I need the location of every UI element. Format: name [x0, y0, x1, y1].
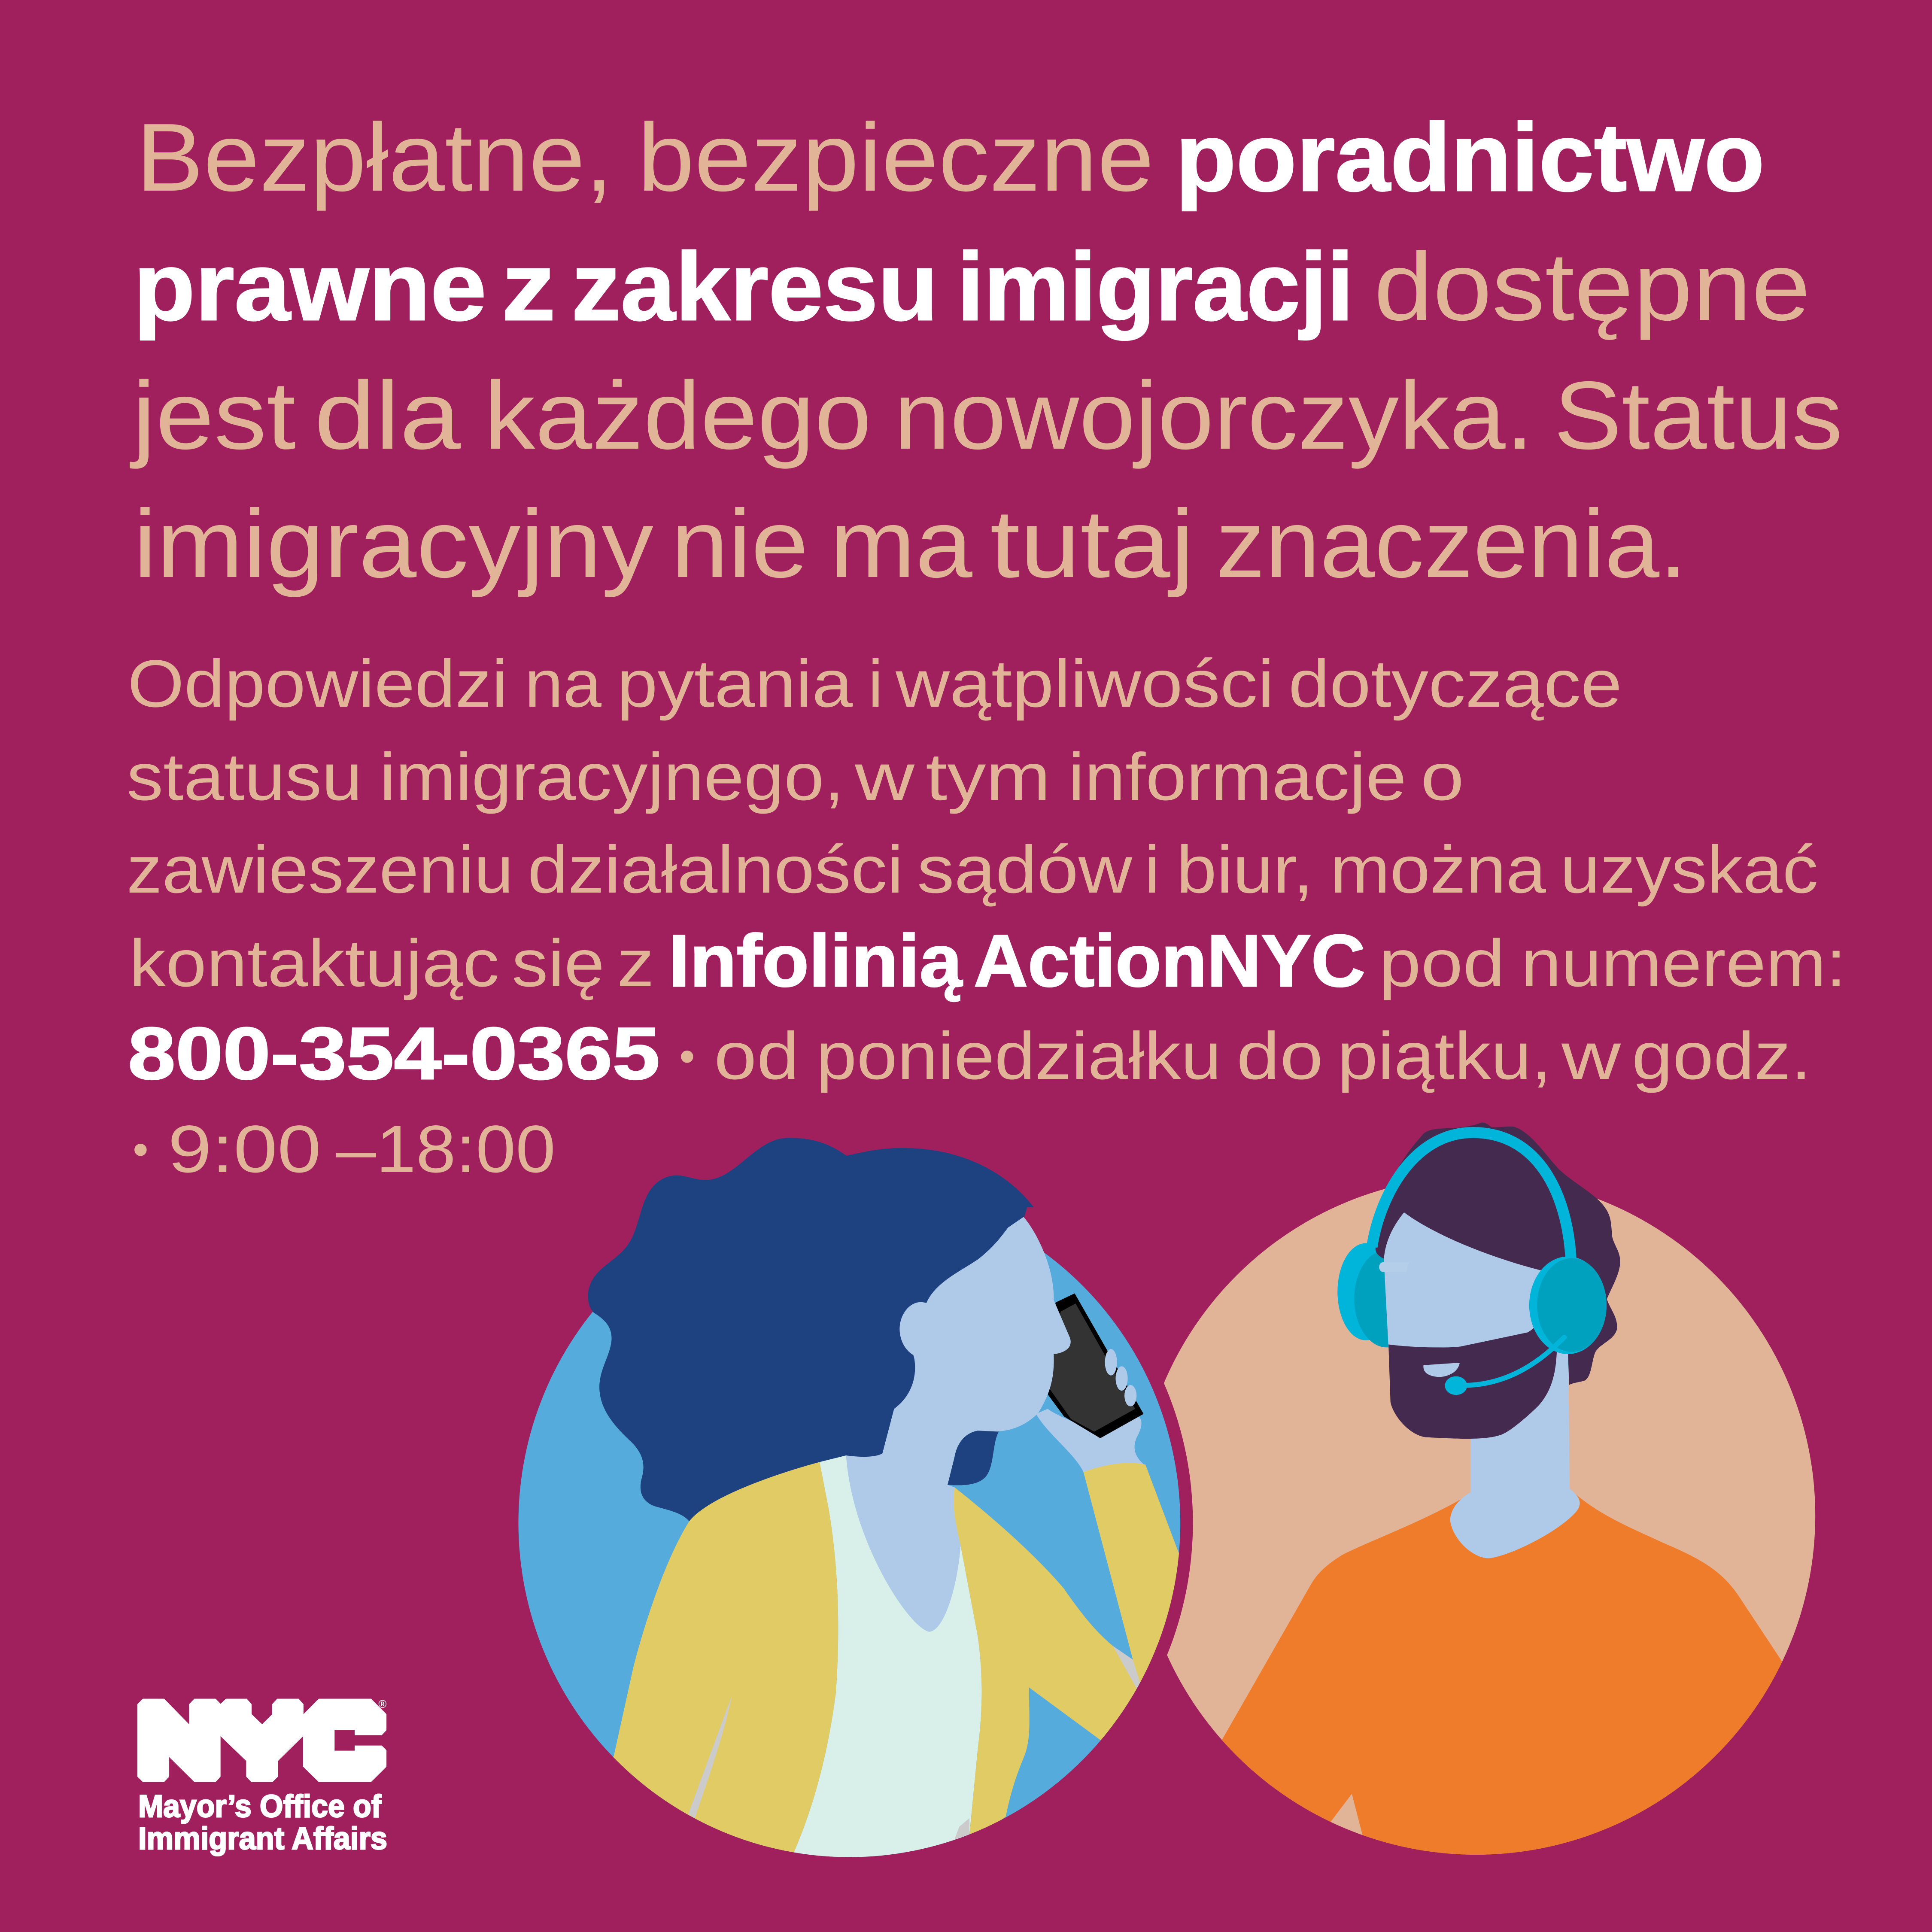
body line 2: statusu — [127, 740, 362, 814]
body line 5: phone number and days: 800-354-0365 — [128, 1012, 660, 1095]
body line 3: można — [1330, 832, 1546, 907]
fingers — [1105, 1349, 1136, 1406]
body line 2 — [127, 740, 1464, 814]
blue circle — [518, 1188, 1180, 1857]
body line 3: działalności — [528, 832, 903, 907]
body line 1: dotyczące — [1288, 647, 1622, 721]
body line 4 — [129, 920, 1846, 1002]
heading line 2: zakresu — [571, 232, 938, 340]
yellow jacket left — [613, 1462, 838, 1852]
mouth — [1423, 1363, 1460, 1377]
NYC wordmark — [137, 1699, 386, 1782]
body line 2: informacje — [1068, 740, 1406, 814]
face — [1384, 1212, 1541, 1350]
left ear cup — [1337, 1243, 1419, 1347]
body line 6: hours: –18:00 — [336, 1112, 556, 1187]
registered mark: ® — [378, 1698, 387, 1710]
body line 4: kontaktując — [129, 926, 499, 1001]
heading line 3: nowojorczyka. — [894, 361, 1534, 469]
heading line 2: z — [501, 232, 556, 340]
heading line 4: imigracyjny — [134, 489, 654, 598]
phone — [1045, 1293, 1144, 1438]
body line 4: ActionNYC — [974, 920, 1365, 1002]
body text — [127, 647, 1846, 1187]
hair — [588, 1138, 1034, 1521]
heading line 1: bezpieczne — [638, 103, 1154, 211]
heading line 1 — [136, 103, 1765, 211]
body line 4: numerem: — [1521, 926, 1846, 1001]
body line 1: Odpowiedzi — [128, 647, 508, 721]
separating ring — [506, 1176, 1193, 1870]
hair — [1376, 1122, 1620, 1385]
heading line 4: nie — [671, 489, 808, 598]
body line 2: w — [854, 740, 915, 814]
man's head — [1337, 1122, 1620, 1439]
body line 3: sądów — [917, 832, 1133, 907]
heading line 3: każdego — [484, 361, 872, 469]
neck — [1450, 1348, 1580, 1558]
nose — [1379, 1262, 1409, 1272]
body line 5: phone number and days — [128, 1012, 1811, 1095]
body line 1: i — [868, 647, 883, 721]
yellow jacket right — [954, 1487, 1145, 1844]
ear — [899, 1302, 936, 1356]
body line 1: na — [525, 647, 601, 721]
body line 5: phone number and days: w — [1561, 1019, 1622, 1094]
heading line 4 — [134, 489, 1687, 598]
office name line 2: Immigrant Affairs — [138, 1821, 387, 1856]
logo: NYC Mayor's Office of Immigrant Affairs — [137, 1698, 387, 1856]
orange shirt — [1222, 1494, 1782, 1855]
heading line 1: Bezpłatne, — [136, 103, 613, 211]
body line 1 — [128, 647, 1622, 721]
body line 1: wątpliwości — [895, 647, 1274, 721]
heading line 3: dla — [314, 361, 461, 469]
office name: Mayor’s Office of — [138, 1789, 382, 1824]
heading line 3 — [129, 361, 1843, 469]
body line 3: biur, — [1176, 832, 1313, 907]
beard — [1388, 1326, 1557, 1439]
body line 4: pod — [1379, 926, 1505, 1001]
body line 5: phone number and days: do — [1236, 1019, 1323, 1094]
right ear cup — [1529, 1257, 1607, 1354]
body line 3 — [127, 832, 1818, 907]
heading line 2: dostępne — [1374, 232, 1810, 340]
body line 5: phone number and days: od — [714, 1019, 799, 1094]
body line 5: phone number and days: piątku, — [1337, 1019, 1552, 1094]
hair over ear cup — [1376, 1235, 1398, 1259]
body line 3: zawieszeniu — [127, 832, 513, 907]
forearm and hand — [1036, 1409, 1145, 1472]
white top — [794, 1455, 981, 1857]
body line 5: phone number and days: • — [679, 1031, 695, 1081]
body line 6: hours: 9:00 — [168, 1112, 321, 1187]
headband — [1372, 1133, 1571, 1258]
peach circle — [1137, 1176, 1815, 1855]
heading line 2: imigracji — [957, 232, 1354, 340]
body line 6: hours: • — [133, 1124, 149, 1175]
heading line 3: Status — [1554, 361, 1843, 469]
microphone — [1445, 1337, 1564, 1395]
body line 4: z — [617, 926, 654, 1001]
yellow sleeve — [1084, 1463, 1183, 1685]
jacket fold — [688, 1695, 732, 1818]
top fold — [954, 1818, 969, 1839]
hair shadow under chin — [948, 1431, 999, 1485]
body line 4: się — [512, 926, 605, 1001]
illustration: woman on phone — [506, 1138, 1193, 1885]
body line 2: tym — [926, 740, 1051, 814]
heading — [129, 103, 1843, 598]
body line 1: pytania — [617, 647, 853, 721]
body line 4: Infolinią — [668, 920, 963, 1002]
heading line 3: jest — [129, 361, 296, 469]
body line 2: imigracyjnego, — [380, 740, 844, 814]
heading line 4: tutaj — [990, 489, 1194, 598]
man's body — [1164, 1188, 1815, 1855]
shirt fold — [1330, 1794, 1363, 1835]
heading line 4: ma — [830, 489, 973, 598]
body line 5: phone number and days: godz. — [1632, 1019, 1811, 1094]
heading line 2: prawne — [134, 232, 486, 340]
body line 3: i — [1145, 832, 1160, 907]
body line 3: uzyskać — [1560, 832, 1818, 907]
heading line 1: poradnictwo — [1176, 103, 1765, 211]
heading line 2 — [134, 232, 1810, 340]
body line 6: hours — [133, 1112, 556, 1187]
body line 5: phone number and days: poniedziałku — [816, 1019, 1221, 1094]
jacket shadow — [1113, 1646, 1143, 1690]
face, neck and chest — [846, 1196, 1071, 1632]
clothing — [613, 1455, 1179, 1857]
illustration: man with headset — [1164, 1122, 1815, 1855]
heading line 4: znaczenia. — [1216, 489, 1687, 598]
body line 2: o — [1421, 740, 1464, 814]
